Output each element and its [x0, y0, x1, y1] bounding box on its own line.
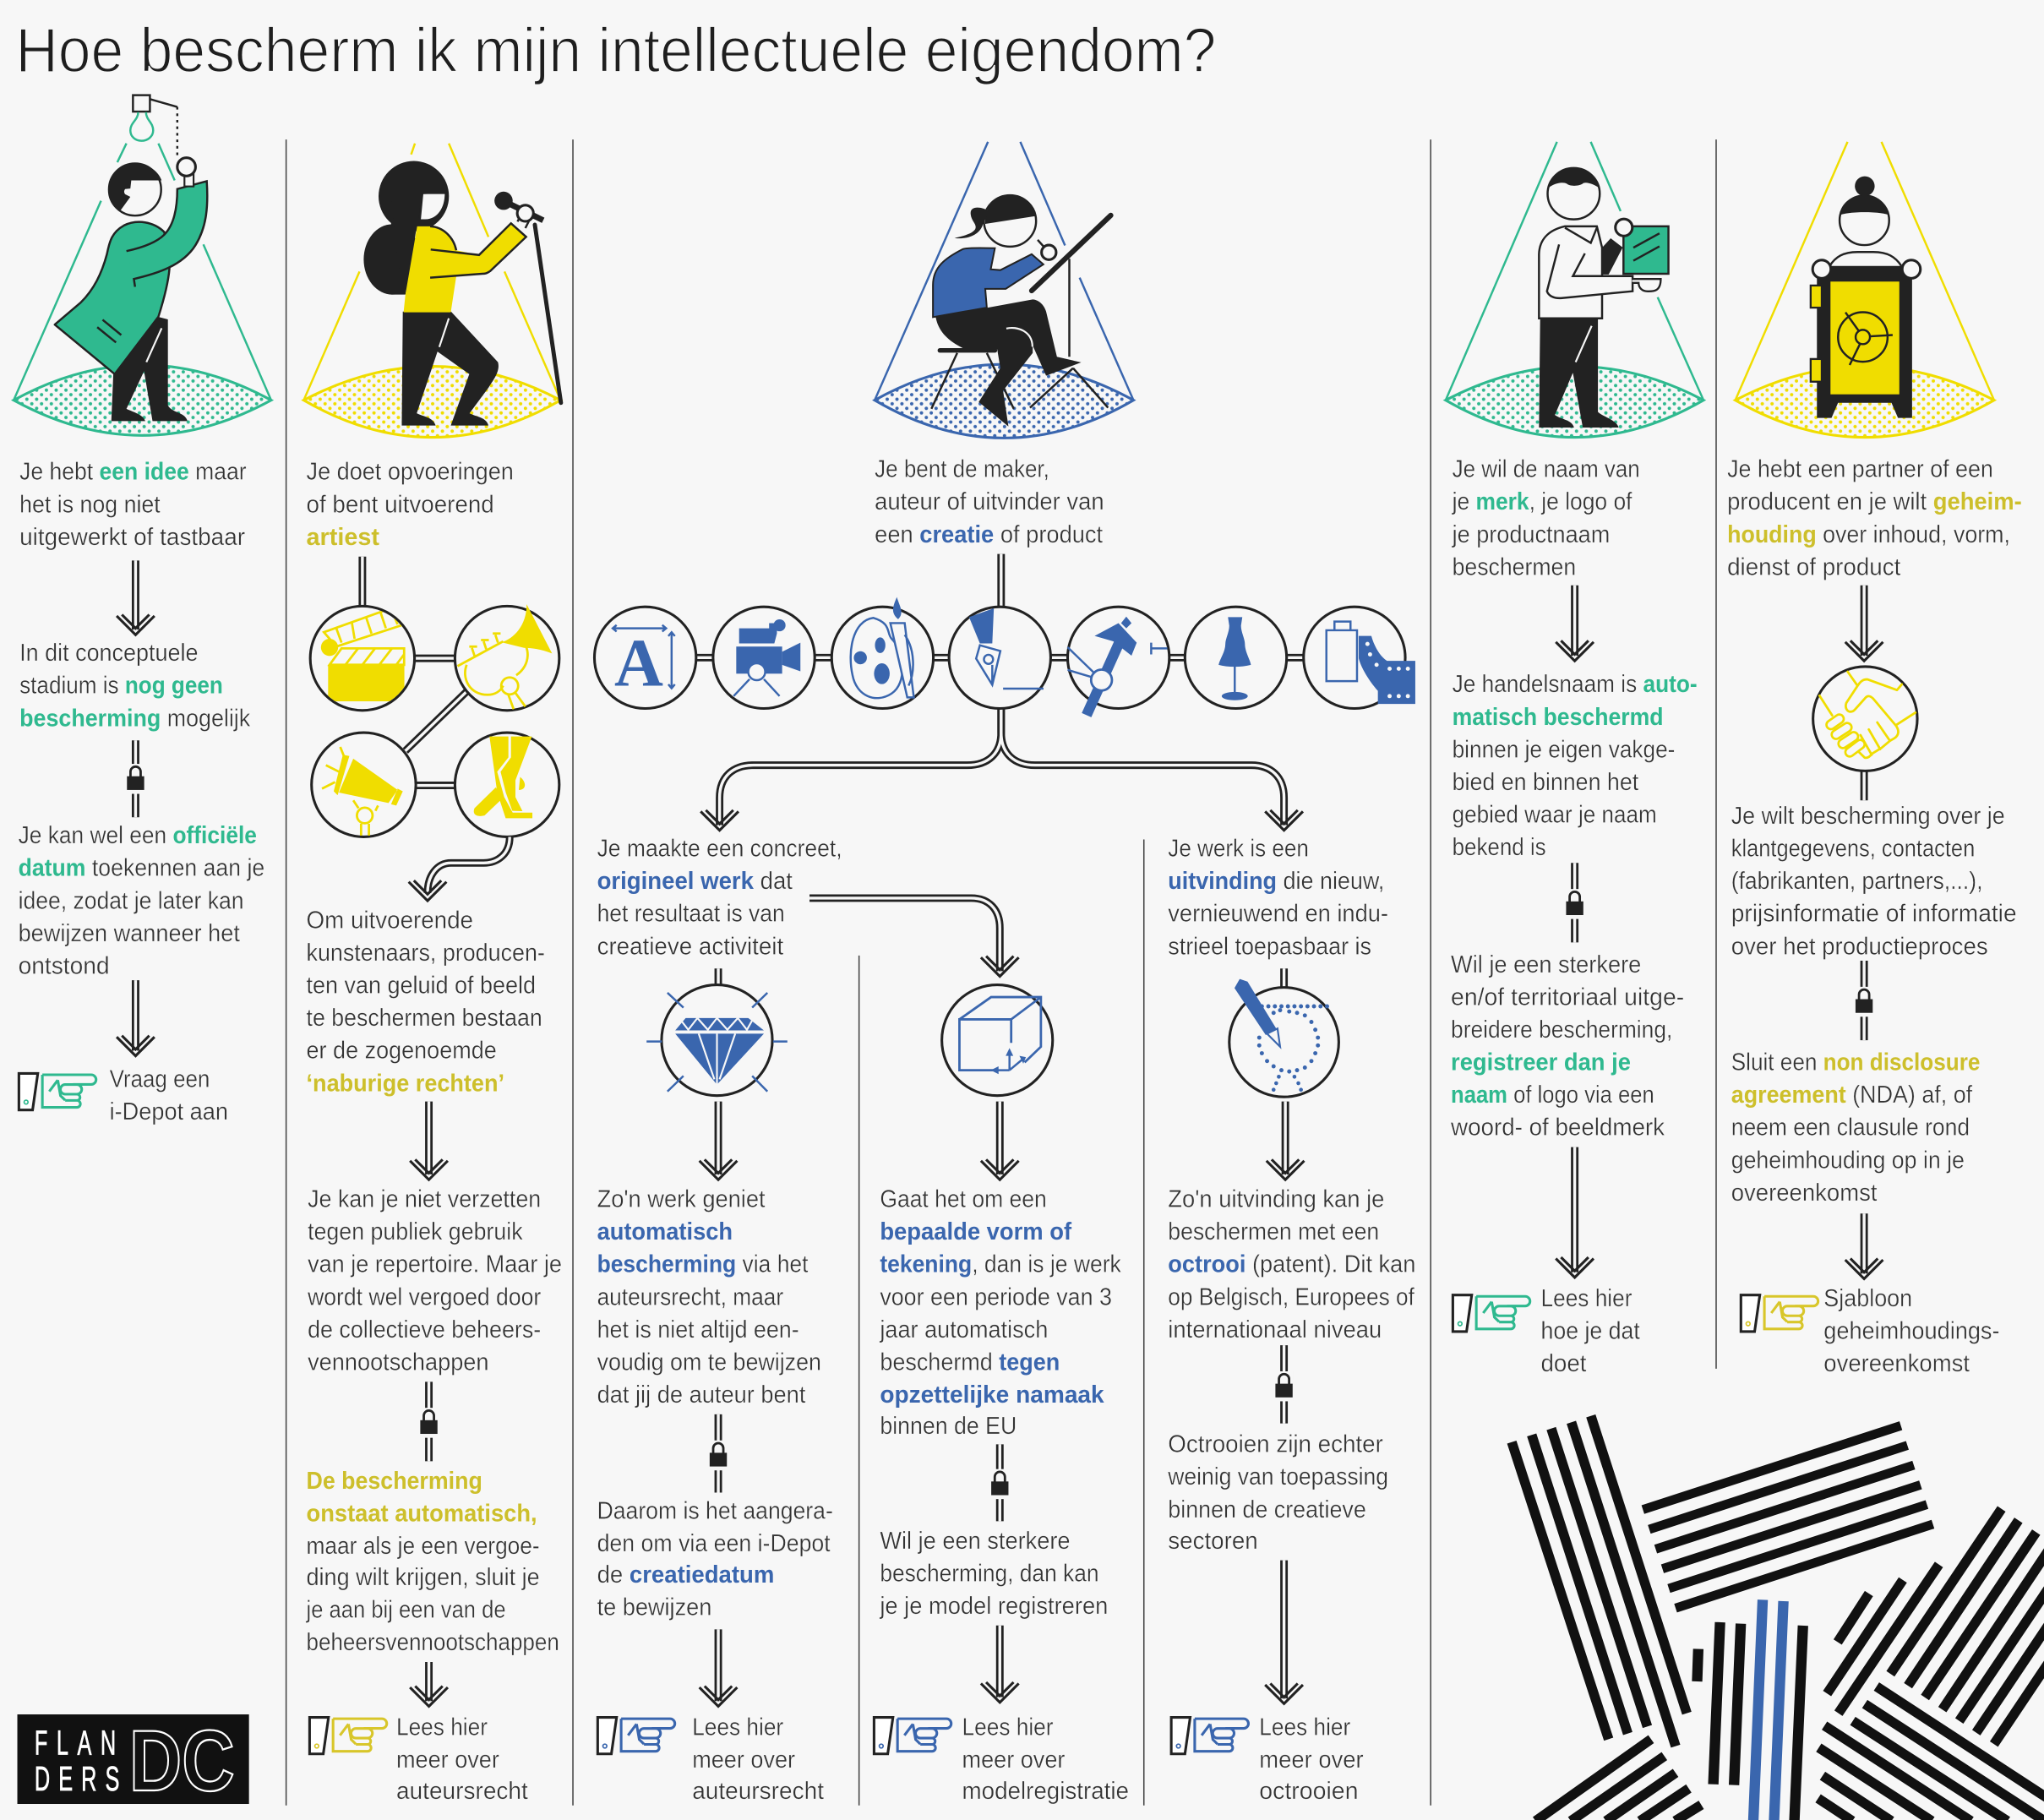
lock connector [420, 1381, 438, 1461]
link: auteursrecht [692, 1713, 824, 1804]
text: registreren: Wil je een sterkere [1451, 951, 1641, 978]
arrow: curved down [409, 836, 510, 901]
icon: hammer [1067, 607, 1169, 715]
link: i-Depot [110, 1065, 228, 1125]
text: creatiedatum: den om via een i-Depot [597, 1529, 831, 1556]
text: officiele datum: datum toekennen aan je [19, 854, 264, 881]
text: publiek gebruik: van je repertoire. Maar je [308, 1251, 562, 1278]
lock connector [709, 1414, 728, 1492]
link: octrooien [1259, 1713, 1364, 1804]
text: idee intro: het is nog niet [19, 490, 161, 517]
link: i-Depot: i-Depot aan [110, 1098, 228, 1125]
illustration: performing artist [303, 144, 561, 438]
text: NDA: overeenkomst [1731, 1179, 1878, 1206]
icon: cube design [942, 985, 1053, 1096]
text: merk intro: je productnaam [1452, 520, 1610, 548]
text: octrooi: internationaal niveau [1168, 1316, 1382, 1343]
icon: film roll [1304, 607, 1415, 708]
text: idee intro: uitgewerkt of tastbaar [19, 523, 245, 550]
text: vorm van tekening: jaar automatisch [879, 1316, 1048, 1343]
text: handelsnaam: matisch beschermd [1453, 703, 1664, 730]
text: creatie intro: auteur of uitvinder van [875, 488, 1104, 515]
text: klantgegevens [1731, 802, 2017, 959]
arrow [1845, 586, 1883, 661]
text: vorm van tekening: opzettelijke namaak [880, 1381, 1104, 1408]
connectors into icons [718, 968, 1284, 988]
lock connector [1566, 863, 1583, 942]
text: registreren [1450, 951, 1684, 1141]
text: automatische bescherming werk [597, 1185, 821, 1408]
text: creatiedatum [597, 1496, 833, 1620]
text: uitvinding: Je werk is een [1168, 835, 1309, 862]
text: conceptueel stadium: In dit conceptuele [19, 639, 198, 666]
arrow [1556, 1147, 1594, 1278]
text: registreren: registreer dan je [1451, 1049, 1631, 1076]
icon: pointing hand [597, 1718, 675, 1754]
panel: merk [1446, 142, 1703, 1376]
text: naburige rechten: ‘naburige rechten’ [307, 1069, 504, 1096]
connector [999, 554, 1004, 608]
text: publiek gebruik: tegen publiek gebruik [308, 1218, 523, 1245]
icon: megaphone [312, 733, 416, 836]
text: model registreren: Wil je een sterkere [880, 1527, 1071, 1554]
arrow [117, 980, 155, 1056]
link: hoe je dat doet: doet [1541, 1349, 1587, 1376]
link: sjabloon: geheimhoudings- [1823, 1316, 2000, 1343]
text: handelsnaam: bied en binnen het [1453, 768, 1638, 795]
arrow [117, 560, 155, 635]
icon: palette and brush [831, 597, 934, 708]
text: NDA: neem een clausule rond [1731, 1114, 1970, 1141]
link: modelregistratie [962, 1713, 1129, 1804]
icon: diamond [646, 985, 788, 1096]
connectors between performer icons [406, 658, 466, 786]
text: klantgegevens: (fabrikanten, partners,...), [1731, 867, 1982, 894]
icon: typography [594, 607, 696, 708]
text: automatische bescherming werk: het is niet altijd een- [597, 1316, 799, 1343]
text: model registreren [879, 1527, 1108, 1619]
arrow [410, 1662, 448, 1706]
text: registreren: en/of territoriaal uitge- [1451, 983, 1684, 1010]
text: creatiedatum: Daarom is het aangera- [597, 1496, 833, 1523]
text: automatische bescherming: De bescherming [307, 1467, 482, 1494]
text: klantgegevens: Je wilt bescherming over je [1731, 802, 2005, 829]
branching arrows [700, 709, 1303, 831]
panel: idee [14, 95, 271, 1809]
link: modelregistratie: modelregistratie [962, 1777, 1129, 1804]
text: vorm van tekening: tekening, dan is je werk [880, 1251, 1122, 1278]
text: publiek gebruik: Je kan je niet verzetten [308, 1185, 541, 1212]
panel: geheimhouding [1727, 142, 2022, 1376]
text: NDA: agreement (NDA) af, of [1731, 1081, 1972, 1108]
text: creatie intro: Je bent de maker, [875, 455, 1049, 482]
link: modelregistratie: meer over [962, 1746, 1065, 1773]
text: uitvinding: strieel toepasbaar is [1168, 932, 1371, 959]
text: artiest intro: artiest [307, 523, 380, 550]
link: sjabloon [1823, 1284, 2000, 1376]
text: geheimhouding intro: producent en je wilt geheim- [1727, 488, 2022, 515]
text: model registreren: bescherming, dan kan [880, 1559, 1099, 1586]
arrow [1556, 586, 1594, 661]
text: handelsnaam: gebied waar je naam [1453, 800, 1657, 827]
text: merk intro: je merk, je logo of [1452, 488, 1632, 515]
text: automatische bescherming: je aan bij een van de [306, 1596, 506, 1623]
text: automatische bescherming werk: automatisch [597, 1218, 733, 1245]
icon: pointing hand [874, 1718, 951, 1754]
arrows from icons [700, 1102, 1305, 1180]
link: auteursrecht: Lees hier [692, 1713, 783, 1740]
text: octrooi: beschermen met een [1168, 1218, 1379, 1245]
text: geheimhouding intro: houding over inhoud, vorm, [1727, 520, 2010, 548]
text: publiek gebruik: vennootschappen [308, 1348, 489, 1375]
arrow [1845, 1213, 1883, 1278]
text: vorm van tekening: Gaat het om een [880, 1185, 1047, 1212]
text: idee intro: Je hebt een idee maar [19, 458, 247, 485]
text: automatische bescherming werk: auteursrecht, maar [597, 1283, 783, 1310]
panel: artiest [303, 144, 562, 1804]
text: origineel werk: Je maakte een concreet, [597, 835, 842, 862]
icon: handshake [1813, 667, 1917, 800]
arrow [981, 1626, 1019, 1703]
text: model registreren: je je model registreren [879, 1592, 1108, 1619]
panel: creatie [594, 142, 1415, 1804]
link: auteursrecht: auteursrecht [396, 1777, 528, 1804]
lock connector [1275, 1345, 1293, 1424]
link: octrooien: meer over [1259, 1746, 1364, 1773]
text: registreren: breidere bescherming, [1451, 1016, 1672, 1043]
logo: Flanders DC [18, 1713, 249, 1809]
text: creatie intro: een creatie of product [875, 520, 1103, 548]
text: origineel werk [597, 835, 842, 959]
arrow: to model branch [809, 898, 1019, 977]
link: auteursrecht: meer over [692, 1746, 795, 1773]
text: merk intro: Je wil de naam van [1453, 455, 1640, 482]
text: registreren: naam of logo via een [1451, 1081, 1654, 1108]
text: conceptueel stadium: stadium is nog geen [19, 672, 223, 699]
connectors between creation icons [691, 655, 1310, 660]
text: artiest intro: Je doet opvoeringen [307, 458, 514, 485]
text: creatiedatum: de creatiedatum [597, 1561, 774, 1588]
link: auteursrecht [396, 1713, 528, 1804]
decoration: striped pattern [1512, 1416, 2044, 1820]
logo: Flanders DC: DERS [35, 1760, 128, 1799]
icon: pencil and dotted invention [1229, 979, 1338, 1097]
text: handelsnaam: Je handelsnaam is auto- [1453, 670, 1698, 697]
text: naburige rechten: er de zogenoemde [307, 1037, 497, 1064]
text: uitvinding: vernieuwend en indu- [1168, 900, 1388, 927]
text: octrooi [1168, 1185, 1415, 1343]
text: publiek gebruik: de collectieve beheers- [308, 1316, 541, 1343]
icon: fountain pen nib [949, 607, 1050, 708]
text: publiek gebruik: wordt wel vergoed door [307, 1283, 541, 1310]
title: Hoe bescherm ik mijn intellectuele eigendom? [16, 15, 1216, 85]
text: NDA [1731, 1049, 1980, 1206]
text: officiele datum: Je kan wel een officiële [19, 821, 257, 848]
link: hoe je dat doet [1541, 1284, 1640, 1376]
text: automatische bescherming werk: bescherming via het [597, 1251, 809, 1278]
icon: pointing hand [309, 1718, 387, 1754]
link: sjabloon: Sjabloon [1823, 1284, 1912, 1311]
connector [360, 557, 365, 608]
text: handelsnaam: bekend is [1453, 833, 1546, 860]
text: officiele datum [19, 821, 264, 978]
text: geheimhouding intro [1727, 455, 2022, 580]
illustration: partner with safe [1736, 142, 1994, 438]
text: automatische bescherming: maar als je een vergoe- [307, 1532, 540, 1559]
link: i-Depot: Vraag een [110, 1065, 210, 1093]
text: publiek gebruik [307, 1185, 562, 1375]
text: naburige rechten: ten van geluid of beeld [307, 972, 536, 999]
link: hoe je dat doet: Lees hier [1541, 1284, 1632, 1311]
text: automatische bescherming werk: dat jij de auteur bent [597, 1381, 806, 1408]
icon: film clapper [310, 606, 415, 711]
icon: pointing hand [1453, 1295, 1530, 1332]
text: geheimhouding intro: Je hebt een partner of een [1727, 455, 1993, 482]
text: vorm van tekening: binnen de EU [880, 1412, 1017, 1439]
link: auteursrecht: meer over [396, 1746, 499, 1773]
logo: Flanders DC: DC [129, 1713, 235, 1809]
logo: Flanders DC: FLAN [35, 1724, 125, 1763]
text: officiele datum: idee, zodat je later kan [19, 886, 243, 913]
text: conceptueel stadium [19, 639, 251, 731]
text: vorm van tekening: bepaalde vorm of [880, 1218, 1072, 1245]
text: creatieve sectoren [1167, 1430, 1388, 1554]
link: auteursrecht: Lees hier [396, 1713, 488, 1740]
text: naburige rechten: te beschermen bestaan [307, 1004, 542, 1031]
link: octrooien: Lees hier [1259, 1713, 1350, 1740]
text: octrooi: op Belgisch, Europees of [1168, 1283, 1414, 1310]
text: automatische bescherming: ding wilt krijgen, sluit je [307, 1563, 540, 1590]
text: creatieve sectoren: weinig van toepassing [1167, 1463, 1388, 1490]
text: NDA: Sluit een non disclosure [1731, 1049, 1980, 1076]
text: automatische bescherming werk: Zo'n werk geniet [597, 1185, 766, 1212]
icon: dress mannequin [1185, 607, 1287, 708]
text: creatieve sectoren: binnen de creatieve [1168, 1496, 1366, 1523]
text: uitvinding [1168, 835, 1388, 959]
text: creatieve sectoren: sectoren [1168, 1527, 1258, 1554]
text: handelsnaam: binnen je eigen vakge- [1453, 735, 1675, 762]
text: vorm van tekening: voor een periode van 3 [880, 1283, 1112, 1310]
text: klantgegevens: prijsinformatie of informatie [1731, 900, 2017, 927]
text: naburige rechten: Om uitvoerende [307, 906, 473, 933]
icon: typography: A [614, 626, 663, 700]
link: sjabloon: overeenkomst [1823, 1349, 1970, 1376]
text: creatieve sectoren: Octrooien zijn echter [1168, 1430, 1383, 1458]
text: automatische bescherming [306, 1467, 559, 1655]
lock connector [1855, 961, 1873, 1040]
text: uitvinding: uitvinding die nieuw, [1168, 867, 1384, 894]
illustration: seated creator at easel [875, 142, 1133, 438]
text: octrooi: octrooi (patent). Dit kan [1168, 1251, 1415, 1278]
text: automatische bescherming werk: voudig om te bewijzen [597, 1348, 821, 1375]
text: artiest intro [307, 458, 514, 550]
text: artiest intro: of bent uitvoerend [307, 490, 494, 517]
text: klantgegevens: klantgegevens, contacten [1731, 835, 1975, 862]
text: NDA: geheimhouding op in je [1731, 1146, 1965, 1173]
text: merk intro: beschermen [1453, 553, 1576, 580]
link: octrooien: octrooien [1259, 1777, 1359, 1804]
illustration: man with idea under lamp [14, 95, 271, 435]
text: origineel werk: het resultaat is van [597, 900, 785, 927]
icon: pointing hand [1741, 1295, 1818, 1332]
arrow [410, 1102, 448, 1180]
text: octrooi: Zo'n uitvinding kan je [1168, 1185, 1384, 1212]
text: naburige rechten: kunstenaars, producen- [307, 939, 545, 966]
text: creatie intro [875, 455, 1104, 548]
text: automatische bescherming: onstaat automatisch, [307, 1499, 537, 1526]
text: registreren: woord- of beeldmerk [1450, 1114, 1665, 1141]
arrow [1265, 1561, 1303, 1703]
text: automatische bescherming: beheersvennootschappen [307, 1628, 559, 1655]
icon: dancing legs [455, 733, 559, 836]
text: conceptueel stadium: bescherming mogelijk [19, 704, 251, 731]
text: officiele datum: ontstond [19, 951, 110, 978]
lock connector [990, 1444, 1009, 1521]
icon: film camera [713, 607, 815, 708]
text: geheimhouding intro: dienst of product [1727, 553, 1900, 580]
text: handelsnaam [1453, 670, 1698, 860]
icon: pointing hand [1171, 1718, 1248, 1754]
text: vorm van tekening [879, 1185, 1122, 1439]
text: origineel werk: creatieve activiteit [597, 932, 783, 959]
text: officiele datum: bewijzen wanneer het [19, 919, 240, 946]
illustration: man with logo board [1446, 142, 1703, 438]
text: klantgegevens: over het productieproces [1731, 932, 1988, 959]
text: idee intro [19, 458, 247, 550]
text: vorm van tekening: beschermd tegen [880, 1348, 1060, 1375]
link: modelregistratie: Lees hier [962, 1713, 1054, 1740]
link: hoe je dat doet: hoe je dat [1541, 1316, 1640, 1343]
text: merk intro [1452, 455, 1640, 580]
text: creatiedatum: te bewijzen [597, 1593, 711, 1620]
icon: pointing hand [19, 1073, 96, 1110]
link: auteursrecht: auteursrecht [692, 1777, 824, 1804]
arrow [700, 1629, 737, 1706]
lock connector [127, 740, 144, 817]
text: naburige rechten [307, 906, 545, 1096]
icon: trumpet [455, 604, 559, 711]
text: origineel werk: origineel werk dat [597, 867, 793, 894]
